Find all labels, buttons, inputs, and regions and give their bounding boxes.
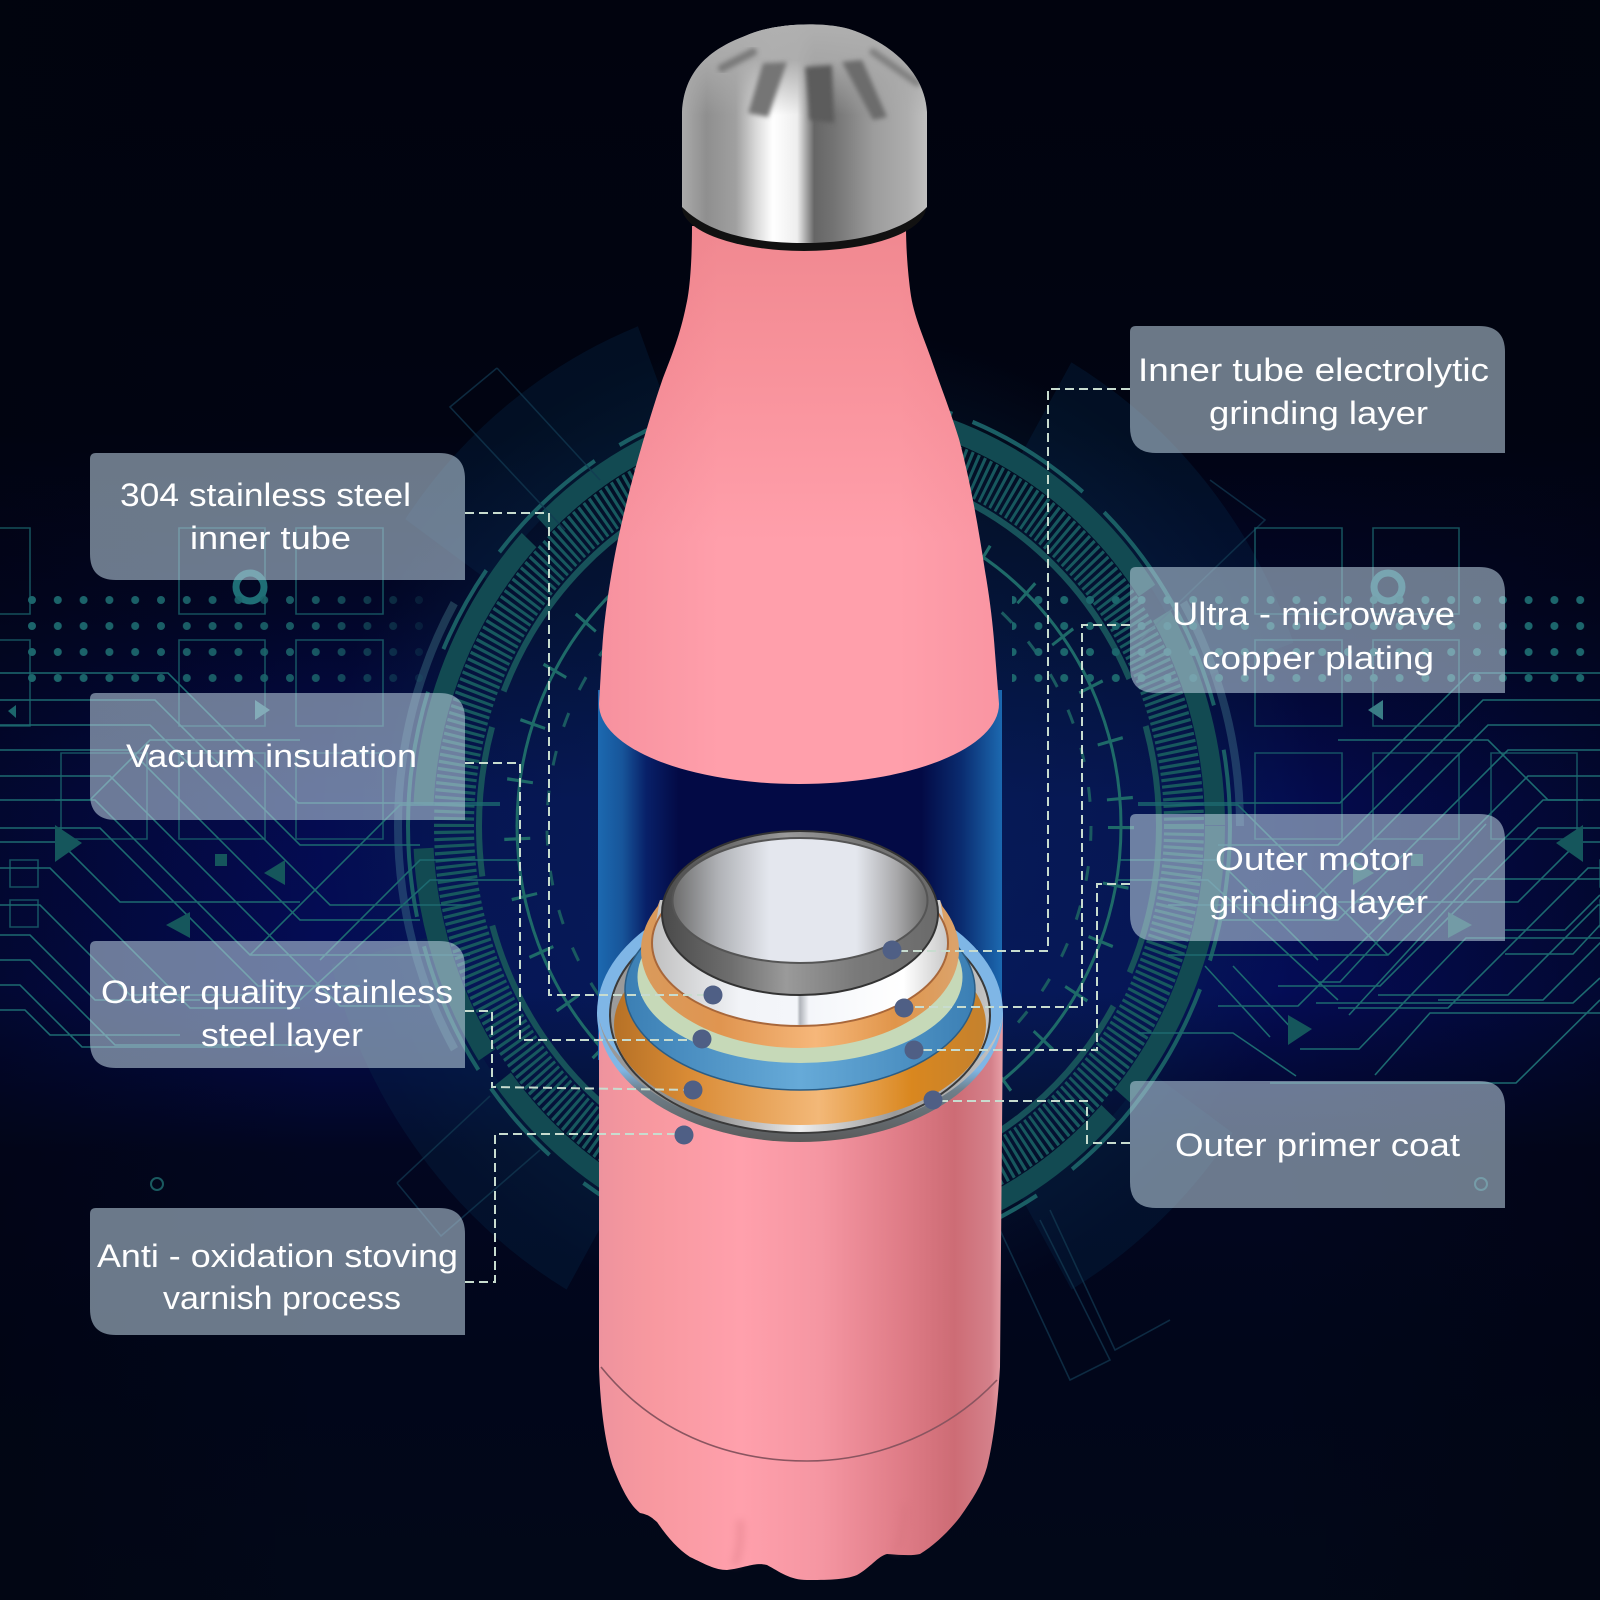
bottle cavity <box>598 690 1002 1060</box>
label text: Outer primer coat <box>1175 1127 1460 1163</box>
label panel <box>90 693 465 820</box>
label text: steel layer <box>201 1017 363 1053</box>
label panel <box>1130 1081 1505 1208</box>
label panel <box>1130 814 1505 941</box>
label panel <box>90 453 465 580</box>
label text: varnish process <box>163 1280 401 1316</box>
dashed leader lines <box>465 389 1130 1282</box>
label text: grinding layer <box>1209 395 1428 431</box>
callout: ultra-microwave copper plating <box>1130 567 1505 693</box>
callout: outer primer coat <box>1130 1081 1505 1208</box>
left circuit board pattern <box>0 528 520 1190</box>
bottle <box>597 20 1003 1580</box>
layer marker dots <box>674 940 942 1144</box>
circular tech HUD backdrop <box>366 346 1272 1306</box>
cutaway layer rings <box>597 831 1003 1142</box>
callout: vacuum insulation <box>90 693 465 820</box>
stainless cap <box>682 20 927 251</box>
label text: inner tube <box>190 520 351 556</box>
label text: grinding layer <box>1209 884 1428 920</box>
bottle lower body <box>599 1013 1003 1580</box>
bottle upper body <box>599 226 999 784</box>
label text: Outer motor <box>1215 841 1413 877</box>
callout: inner tube electrolytic grinding layer <box>1130 326 1505 453</box>
label text: copper plating <box>1202 640 1434 676</box>
callout: outer quality stainless steel layer <box>90 941 465 1068</box>
label text: Anti - oxidation stoving <box>97 1238 458 1274</box>
label text: Vacuum insulation <box>126 738 417 774</box>
callout: outer motor grinding layer <box>1130 814 1505 941</box>
callout: anti-oxidation stoving varnish process <box>90 1208 465 1335</box>
callout: 304 stainless steel inner tube <box>90 453 465 580</box>
label text: 304 stainless steel <box>120 477 411 513</box>
label text: Outer quality stainless <box>101 974 453 1010</box>
HUD detail lines <box>397 368 1265 1380</box>
label text: Ultra - microwave <box>1172 596 1455 632</box>
label panel <box>1130 567 1505 693</box>
label panel <box>90 941 465 1068</box>
right circuit board pattern <box>1012 528 1600 1190</box>
label text: Inner tube electrolytic <box>1138 352 1489 388</box>
label panel <box>90 1208 465 1335</box>
label panel <box>1130 326 1505 453</box>
